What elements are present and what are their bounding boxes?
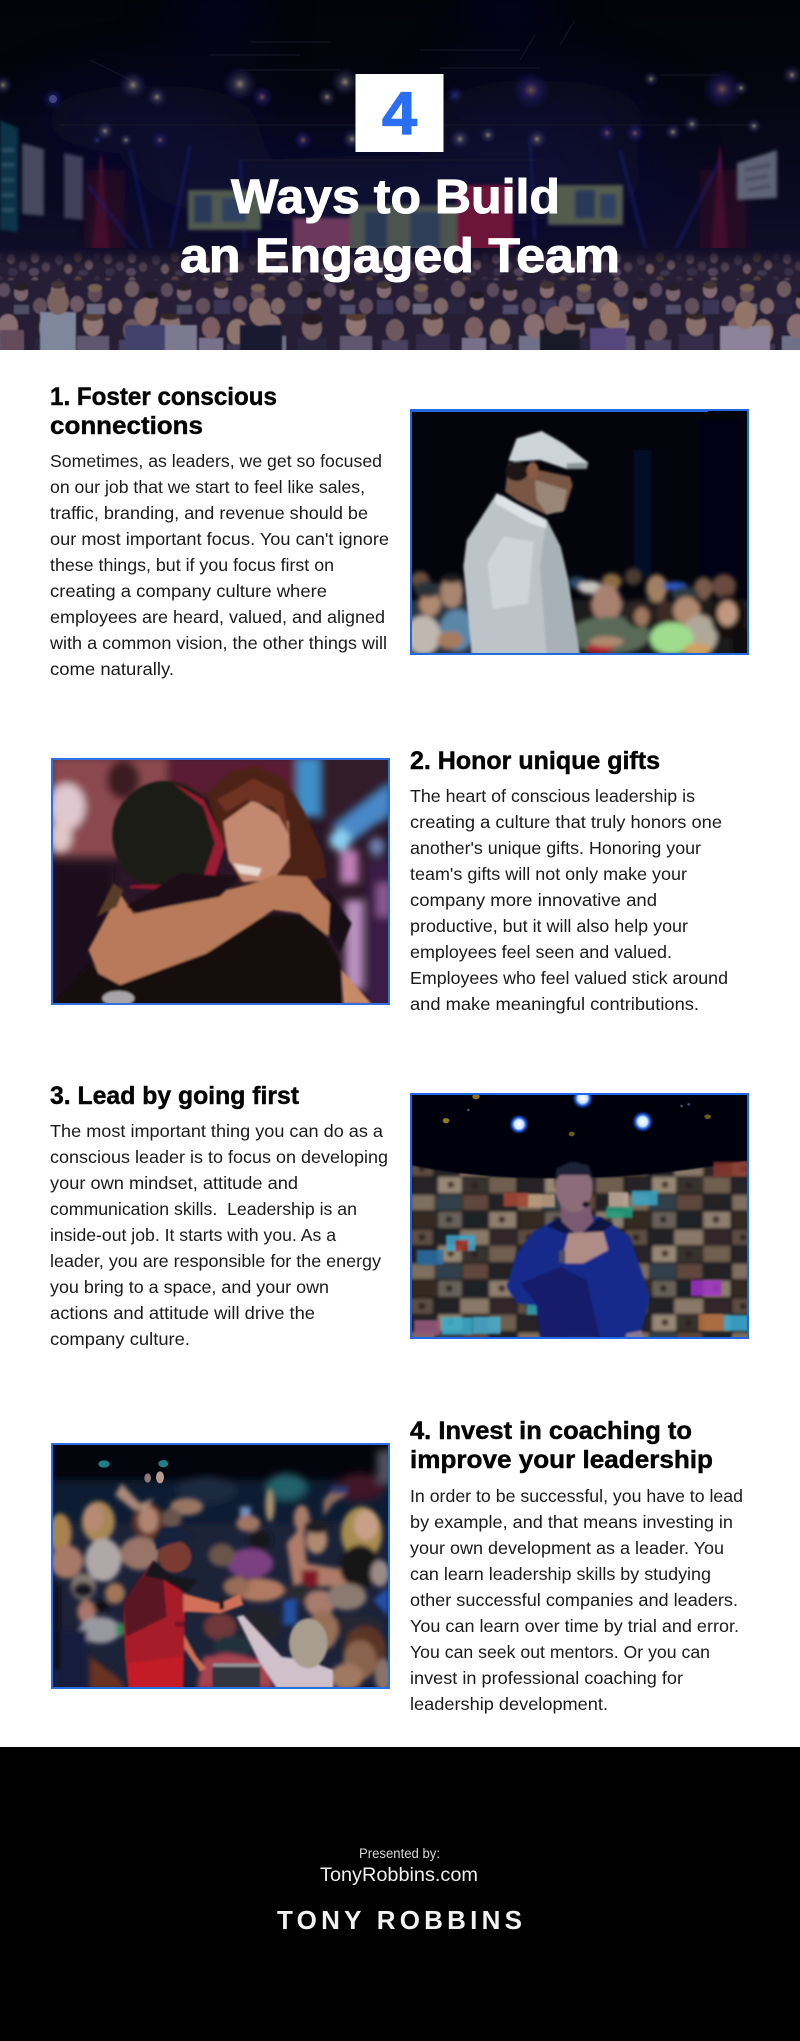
- frame: [52, 1444, 389, 1688]
- photo 1: speaker in white cap and polo facing audience: [410, 409, 749, 655]
- body text 2: The heart of conscious leadership is: [410, 786, 695, 806]
- spot lights: [572, 1088, 593, 1109]
- body text 1: traffic, branding, and revenue should be: [50, 503, 368, 523]
- head and cap: [158, 1541, 192, 1573]
- body text 3: communication skills. Leadership is an: [50, 1199, 357, 1219]
- body text 4: invest in professional coaching for: [410, 1668, 683, 1688]
- video wall: [410, 1090, 750, 1340]
- body text 3: you bring to a space, and your own: [50, 1277, 329, 1297]
- number badge: 4: [382, 80, 418, 147]
- body text 2: employees feel seen and valued.: [410, 942, 672, 962]
- frame: [411, 1094, 748, 1338]
- red curtain columns and blue beams: [85, 140, 746, 260]
- heading 4: [410, 1417, 713, 1474]
- body text 3: conscious leader is to focus on developing: [50, 1147, 388, 1167]
- arm around shoulder: [88, 875, 330, 985]
- stage screens: [188, 185, 623, 254]
- background fans: [82, 1501, 115, 1542]
- podium box: [213, 1663, 260, 1688]
- body text 2: Employees who feel valued stick around: [410, 968, 728, 988]
- front row hands and faces: [71, 1573, 96, 1600]
- body text 1: Sometimes, as leaders, we get so focused: [50, 451, 382, 471]
- photo 2: two women hugging: [51, 758, 390, 1005]
- man in red shirt: [123, 1561, 185, 1688]
- section 4 text: Invest in coaching: [410, 1417, 743, 1714]
- white sleeved fan: [237, 1615, 333, 1688]
- heading 3: 3. Lead by going first: [50, 1082, 300, 1110]
- body text 1: with a common vision, the other things will: [49, 633, 387, 653]
- body text 3: leader, you are responsible for the energy: [50, 1251, 381, 1271]
- body text 2: creating a culture that truly honors one: [410, 812, 722, 832]
- body text 1: on our job that we start to feel like sales,: [50, 477, 365, 497]
- hero photo: event arena with crowd: [0, 0, 800, 350]
- body text 2: company more innovative and: [410, 890, 657, 910]
- body text 4: can learn leadership skills by studying: [410, 1564, 711, 1584]
- white cap: [508, 431, 588, 469]
- body text 4: your own development as a leader. You: [410, 1538, 724, 1558]
- body text 2: and make meaningful contributions.: [410, 994, 699, 1014]
- body text 3: inside-out job. It starts with you. As a: [50, 1225, 336, 1245]
- title: Ways to Build: [231, 171, 560, 224]
- body text 1: our most important focus. You can't ignore: [50, 529, 389, 549]
- body text 3: company culture.: [50, 1329, 190, 1349]
- neck and face: [560, 1203, 593, 1237]
- heading 4: 4. Invest in coaching to: [410, 1417, 692, 1445]
- number badge: [356, 74, 444, 152]
- body text 3: [50, 1121, 388, 1349]
- presented by label: Presented by:: [359, 1846, 440, 1861]
- heading 1: connections: [50, 412, 203, 440]
- body text 1: creating a company culture where: [50, 581, 327, 601]
- dark tint overlay: [0, 0, 800, 350]
- blue shirt: [507, 1217, 650, 1337]
- stage rigging lines: [60, 20, 760, 160]
- title: an Engaged Team: [180, 230, 620, 283]
- heading 1: [50, 383, 277, 440]
- brown-haired woman: [207, 767, 327, 883]
- body text 3: your own mindset, attitude and: [50, 1173, 298, 1193]
- photo 3: speaker with hand on heart before wall of video screens: [410, 1093, 749, 1339]
- section 2 text: Honor unique gifts: [410, 747, 728, 1014]
- hero banner: [0, 0, 800, 354]
- arm: [497, 603, 544, 655]
- body text 2: team's gifts will not only make your: [410, 864, 687, 884]
- body text 2: another's unique gifts. Honoring your: [410, 838, 701, 858]
- body text 4: leadership development.: [410, 1694, 608, 1714]
- frame: [411, 410, 748, 654]
- stage lights: [0, 65, 800, 150]
- website: TonyRobbins.com: [320, 1865, 478, 1886]
- side banners: [0, 120, 777, 232]
- frame: [52, 759, 389, 1004]
- body text 4: You can seek out mentors. Or you can: [410, 1642, 710, 1662]
- body text 2: productive, but it will also help your: [410, 916, 688, 936]
- section 3 text: Lead by going first: [50, 1082, 388, 1349]
- photo 4: speaker in red shirt greeting cheering crowd: [51, 1443, 390, 1689]
- body text 4: You can learn over time by trial and error.: [410, 1616, 739, 1636]
- body text 2: [410, 786, 728, 1014]
- body text 3: actions and attitude will drive the: [50, 1303, 315, 1323]
- audience crowd: [0, 248, 800, 354]
- body text 1: come naturally.: [50, 659, 174, 679]
- Tony Robbins wordmark: TONY ROBBINS: [277, 1905, 522, 1935]
- body text 4: by example, and that means investing in: [410, 1512, 733, 1532]
- footer: [0, 1747, 800, 2041]
- heading 4: improve your leadership: [410, 1446, 713, 1474]
- polo shirt: [463, 493, 580, 655]
- dark clothes: [53, 913, 342, 1005]
- raised arm: [168, 1592, 207, 1672]
- neck and head: [505, 463, 573, 515]
- body text 1: [49, 451, 389, 679]
- heading 2: 2. Honor unique gifts: [410, 747, 660, 775]
- body text 4: other successful companies and leaders.: [410, 1590, 738, 1610]
- body text 3: The most important thing you can do as a: [50, 1121, 383, 1141]
- heading 1: 1. Foster conscious: [50, 383, 277, 411]
- body text 1: these things, but if you focus first on: [50, 555, 334, 575]
- title: [180, 171, 620, 283]
- body text 4: In order to be successful, you have to lead: [410, 1486, 743, 1506]
- body text 4: [410, 1486, 743, 1714]
- hand on chest: [563, 1232, 608, 1263]
- section 1 text: Foster conscious connections: [49, 383, 389, 679]
- body text 1: employees are heard, valued, and aligned: [50, 607, 385, 627]
- hair of woman from behind: [112, 781, 218, 889]
